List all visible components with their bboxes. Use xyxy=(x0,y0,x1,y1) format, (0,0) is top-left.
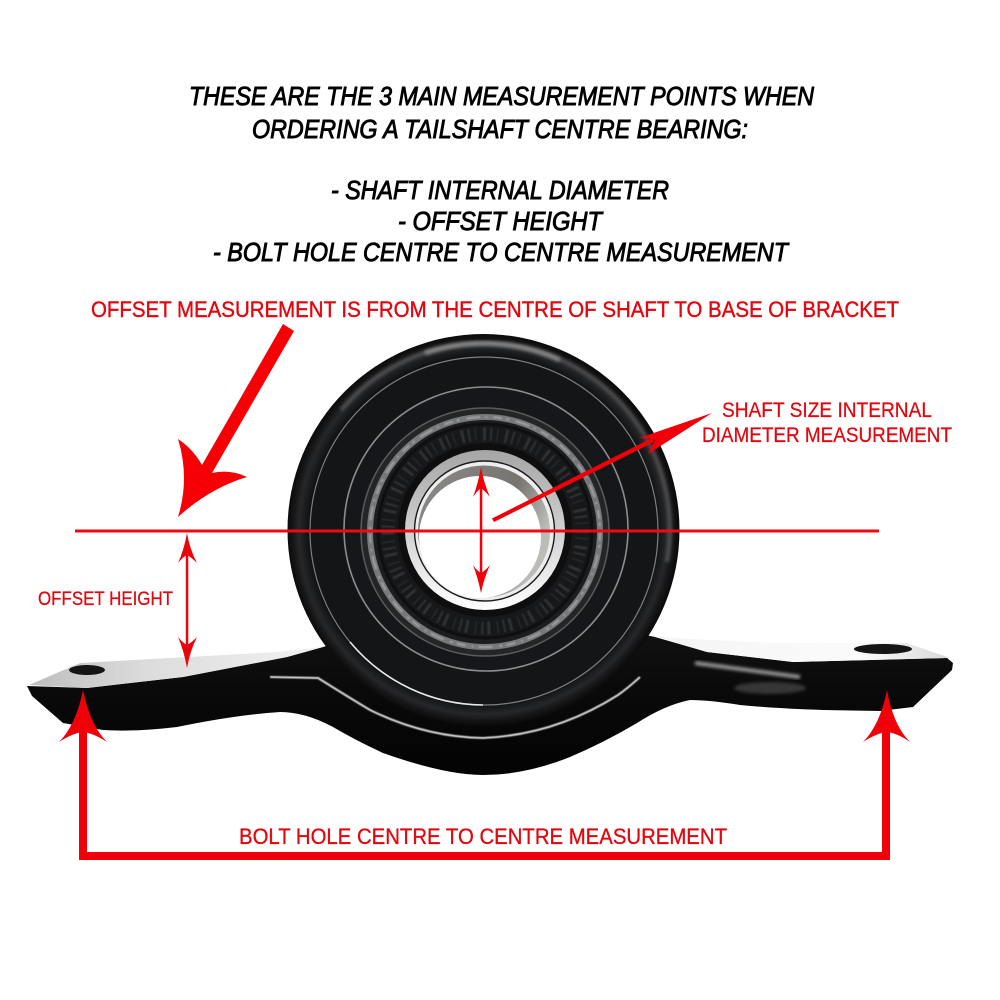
heading: measurement points: - BOLT HOLE CENTRE TO CENTRE MEASUREMENT xyxy=(213,239,790,267)
horizontal centre line xyxy=(75,530,879,532)
shaft size label: SHAFT SIZE INTERNAL xyxy=(722,398,932,422)
shaft size label: DIAMETER MEASUREMENT xyxy=(702,423,952,447)
centre bearing xyxy=(288,334,680,726)
offset height label: OFFSET HEIGHT xyxy=(38,588,173,610)
internal diameter arrow xyxy=(473,467,490,593)
bolt hole label: BOLT HOLE CENTRE TO CENTRE MEASUREMENT xyxy=(239,824,727,849)
bracket xyxy=(27,600,953,775)
heading: measurement points: THESE ARE THE 3 MAIN MEASUREMENT POINTS WHEN xyxy=(189,83,815,111)
heading: measurement points xyxy=(189,83,815,267)
bolt hole bracket arrow xyxy=(59,690,910,860)
shaft size pointer arrow xyxy=(492,413,712,522)
offset measurement note: OFFSET MEASUREMENT IS FROM THE CENTRE OF SHAFT TO BASE OF BRACKET xyxy=(91,297,899,322)
right bolt hole xyxy=(854,644,912,654)
left bolt hole xyxy=(69,665,105,675)
heading: measurement points: - SHAFT INTERNAL DIAMETER xyxy=(331,177,669,205)
big arrow to centre line xyxy=(178,324,294,517)
heading: measurement points: ORDERING A TAILSHAFT CENTRE BEARING: xyxy=(252,116,748,144)
shaft size label xyxy=(702,398,952,447)
offset height arrow xyxy=(178,533,197,668)
heading: measurement points: - OFFSET HEIGHT xyxy=(398,208,604,236)
